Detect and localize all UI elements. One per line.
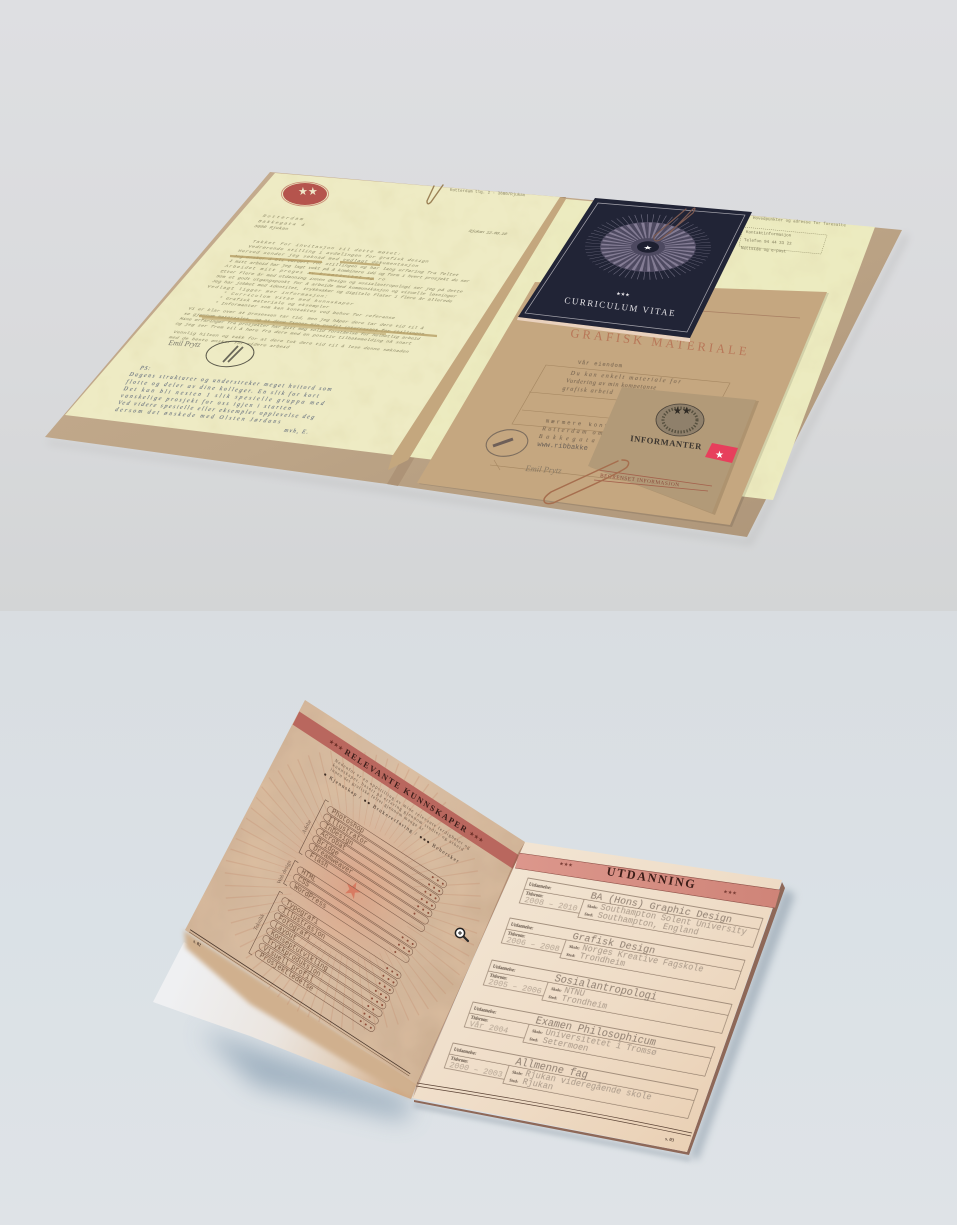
form text: Nærmere kontakt (545, 417, 625, 431)
header band: ★★★ (468, 830, 485, 845)
small typed header: Rotterdam tlg. 2 - 3600/Rjukan (450, 188, 526, 198)
education: Allmenne fag: 2000 – 2003 (448, 1061, 504, 1080)
education: Allmenne fag (443, 1043, 698, 1119)
education: Allmenne fag: Rjukan (521, 1077, 554, 1092)
typed letter: med de beste ønsker for videre arbeid (167, 335, 291, 350)
handwritten note: flotte og deler av dine kolleger. En slik for kort (125, 378, 320, 399)
seal: ★★ (673, 406, 691, 417)
typed letter: Vedrørende stilling i avdelingen for grafisk design (246, 244, 430, 264)
education: BA Graphic Design: BA (Hons) Graphic Design (589, 890, 734, 926)
right page (412, 842, 782, 1152)
cover title: CURRICULUM VITAE (564, 295, 675, 318)
form text: Du kan enkelt materiale for (569, 370, 682, 385)
booklet shadow (200, 1030, 412, 1120)
card: informanter (588, 387, 759, 515)
education: Allmenne fag: Rjukan videregående skole (524, 1069, 653, 1103)
header band: RELEVANTE KUNNSKAPER (343, 746, 469, 835)
photo background: folder (0, 0, 957, 611)
seal: red logo (282, 182, 328, 206)
cover (518, 198, 752, 338)
form text: Bakkegata (538, 434, 595, 445)
red flag with star: ★ (715, 450, 724, 461)
typed letter: Arbeidet mitt preges av kreativitet og ro (223, 264, 387, 282)
rays backdrop: ★ (339, 874, 366, 906)
typed letter: I mitt arbeid har jeg lagt vekt på å kombinere idé og form i hvert prosjekt du ser (227, 258, 472, 284)
handwritten note: PS: (138, 366, 151, 372)
education: Grafisk Design: Sted: (566, 952, 577, 958)
typed letter: Herved sender jeg søknad med vedlagt dokumentasjon (236, 249, 420, 269)
typed letter: Mine erfaringer fra prosjekter har gitt meg solid forståelse for helhetlig arbeid (178, 316, 422, 341)
marker highlights (199, 256, 437, 336)
education: BA Graphic Design: 2008 – 2010 (523, 896, 579, 914)
education: BA Graphic Design: Southampton, England (596, 911, 700, 938)
typed letter: og jeg ser frem til å høre fra dere med en positiv tilbakemelding nå snart (173, 321, 414, 346)
skill names: Visuell profil (262, 945, 314, 984)
education: Grafisk Design: Grafisk Design (571, 931, 657, 957)
folder spine crease (387, 197, 566, 486)
typed letter: Vedlagt ligger mer informasjon: (206, 284, 329, 299)
education: Examen Philosophicum: Utdannelse: (473, 1006, 498, 1015)
group labels: Web design (276, 859, 293, 885)
education: Sosialantropologi: Tidsrom: (489, 973, 509, 981)
education: Sosialantropologi: Sosialantropologi (553, 973, 658, 1004)
skill names: Illustrator (326, 816, 368, 848)
skill names: WordPress (292, 883, 328, 911)
seal (656, 404, 704, 436)
education: Grafisk Design: Norges Kreative Fagskole (581, 943, 705, 975)
typed letter: Jeg har jobbet med identitet, trykksaker og digitale flater i flere år allerede (210, 278, 454, 304)
form text: Rotterdam om (541, 426, 603, 437)
education: Sosialantropologi: 2005 – 2006 (487, 978, 543, 996)
skill names: Prosjektledelse (258, 952, 314, 994)
group labels (253, 818, 313, 932)
education: BA Graphic Design (518, 878, 763, 947)
page stack edge (414, 882, 785, 1155)
education: Sosialantropologi: Skole: (550, 986, 563, 993)
education: Allmenne fag: Allmenne fag (514, 1057, 589, 1082)
page sheet (412, 842, 782, 1152)
skill names: Acrobat (319, 830, 347, 854)
booklet bottom-edge shadow (414, 1102, 690, 1162)
right paper (410, 199, 875, 500)
three stars: ★★★ (616, 291, 630, 299)
clip: cv booklet (654, 208, 695, 241)
footer rules (416, 1083, 692, 1136)
skill names: CSS (296, 876, 310, 890)
education: Examen Philosophicum: Skole: (531, 1028, 544, 1035)
tan fold strip (184, 930, 417, 1098)
typed notes on right paper: Hovedpunkter og adresse for foresatte (753, 216, 846, 228)
education: Grafisk Design: Trondheim (578, 951, 627, 969)
skill names: Fotografi (277, 915, 312, 942)
icon: magnifier cursor (455, 928, 468, 941)
education: BA Graphic Design: Southampton Solent University (599, 903, 748, 937)
skill names: Typografi (284, 900, 319, 927)
education: Grafisk Design: Tidsrom: (507, 931, 527, 939)
typed letter: Vennlig hilsen og takk for at dere tok dere tid til å lese denne søknaden (172, 329, 411, 354)
folder shadow (45, 232, 908, 545)
paperclips (427, 185, 695, 504)
education: Allmenne fag: Skole: (511, 1069, 524, 1076)
typed letter: 3600 Rjukan (252, 224, 290, 231)
typed letter (157, 212, 514, 360)
education: BA Graphic Design: Skole: (586, 903, 599, 910)
education: Examen Philosophicum: Sted: (529, 1036, 540, 1043)
typed letter: Rotterdam (261, 214, 305, 222)
education: Allmenne fag: Sted: (509, 1077, 520, 1084)
folder board (45, 172, 902, 537)
page stack edge (388, 197, 570, 470)
skill names: Konseptutvikling (269, 930, 329, 974)
header band (291, 710, 523, 871)
education: Sosialantropologi (482, 960, 732, 1033)
footer rules and page number (189, 929, 410, 1076)
form lines (490, 365, 730, 482)
letter paper (65, 173, 560, 455)
form text: Vår eiendom (577, 359, 623, 369)
spine shade (413, 842, 525, 1098)
skill names: Photoshop (330, 808, 365, 836)
seal: red logo: ★★ (298, 186, 318, 198)
education: Allmenne fag: Tidsrom: (450, 1056, 470, 1064)
open folder (45, 172, 902, 537)
education: Sosialantropologi: Sted: (548, 994, 559, 1001)
typed letter: Jeg ønsker å bli vurdert for stillingen og har lang erfaring fra feltet (232, 253, 461, 278)
red flag with star (705, 443, 738, 463)
form text: grafisk arbeid (562, 385, 614, 396)
signature and stamp: Emil Prytz (166, 338, 202, 349)
education: Examen Philosophicum: Universitetet i Tromsø (544, 1028, 658, 1058)
clip: letter (427, 185, 443, 204)
rays backdrop (225, 747, 481, 1033)
typed letter: Som et godt utgangspunkt for å arbeide med kommunikasjon og visuelle løsninger (214, 273, 459, 299)
card title: INFORMANTER (630, 433, 703, 452)
clip: envelope (544, 460, 629, 504)
page number: s. 03 (665, 1137, 675, 1144)
left page (153, 700, 525, 1099)
education: Sosialantropologi: Trondheim (560, 994, 609, 1012)
envelope: grafisk materiale (417, 282, 829, 527)
footer rules and page number: s. 02 (192, 938, 203, 948)
intro text: kunnskaper, basert på erfaring gjennom studier og arbeid (331, 762, 465, 853)
top rule (700, 311, 800, 318)
signature: Emil Prytz (524, 463, 563, 476)
skill names: Dreamweaver (311, 845, 354, 877)
envelope body (417, 282, 827, 525)
skill names: InDesign (322, 823, 354, 849)
handwritten note (110, 365, 335, 436)
envelope title: GRAFISK MATERIALE (570, 326, 748, 358)
website line: www.ribbakke (536, 441, 588, 453)
open booklet (153, 700, 785, 1155)
typed letter: se gjennom materialet, og at dere finner min profil interessant for stillingen (182, 312, 426, 336)
education: Examen Philosophicum: Vår 2004 (468, 1019, 510, 1036)
header band: ★★★ (328, 738, 344, 753)
intro text: Nedenfor er en oppstilling av mine relevante ferdigheter og (334, 758, 471, 851)
handwritten note: Dagens strukturer og understreker meget hvitord som (127, 372, 332, 393)
education: BA Graphic Design: Sted: (584, 911, 594, 918)
handwritten note: dersom det ønskede med Olsten Jørdans (114, 407, 282, 425)
form text (538, 357, 684, 450)
education: Sosialantropologi: NTNU (563, 986, 586, 999)
education: Grafisk Design: 2006 – 2008 (505, 936, 561, 954)
handwritten note: vanskelige prosjekt for oss igjen i starten (120, 392, 292, 412)
education: Examen Philosophicum: Examen Philosophicum (534, 1015, 657, 1049)
education: Grafisk Design: Skole: (568, 944, 581, 951)
typed notes on right paper: Nettside og e-post (741, 246, 787, 255)
typed letter: Rjukan 12.08.10 (467, 229, 509, 237)
education: Examen Philosophicum: Setermoen (541, 1036, 590, 1054)
skill names: Bridge (315, 838, 340, 859)
skill names: Trykkproduksjon (265, 937, 322, 979)
typed notes on right paper (739, 216, 846, 255)
skill names: Flash (308, 852, 329, 871)
skill names: Illustrasjon (280, 907, 326, 942)
inner border (525, 203, 745, 332)
skill names (260, 808, 368, 991)
typed letter: Vi er klar over at prosessen tar tid, men jeg håper dere tar dere tid til å (186, 306, 426, 331)
page content (179, 707, 524, 1086)
typed letter: * Grafisk materiale og eksempler (217, 296, 331, 310)
red ribbon text: BEGRENSET INFORMASJON (600, 473, 680, 489)
header band: UTDANNING (605, 864, 697, 891)
intro text: innen det grafiske feltet gjennom mange år (330, 767, 425, 832)
education: Grafisk Design (500, 918, 745, 989)
skill legend: ● Kjennskap / ●● Brukererfaring / ●●● Behersker (322, 771, 460, 865)
skill rows (254, 805, 448, 1033)
skill rating dots (361, 877, 443, 1028)
handwritten note: Det kan bli nesten 1 slik spesielle gruppa med (121, 386, 325, 407)
booklet: curriculum vitae (517, 198, 752, 342)
education: BA Graphic Design: Tidsrom: (525, 891, 545, 899)
starburst emblem (597, 220, 699, 274)
education: Grafisk Design: Utdannelse: (510, 922, 535, 931)
education: BA Graphic Design: Utdannelse: (528, 882, 553, 890)
education: Sosialantropologi: Utdannelse: (492, 964, 517, 973)
typed letter: * Informanter som kan kontaktes ved behov for referanse (213, 301, 396, 321)
handwritten note: mvh, E. (283, 428, 309, 436)
group labels: Adobe (301, 818, 313, 835)
typed letter: Takket for invitasjon til dette møtet: (251, 239, 402, 256)
typed letter: Bakkegata 4 (256, 219, 306, 227)
handwritten note: Ved videre spesielle eller eksempler opplevelse deg (117, 400, 315, 421)
header band: ★★★ (559, 861, 574, 869)
skill names: Layout (273, 922, 298, 943)
stamp (484, 427, 530, 459)
signature and stamp (166, 338, 255, 369)
starburst emblem: ★ (643, 244, 653, 251)
skill names: HTML (300, 869, 317, 885)
booklet right-edge shadow (690, 888, 795, 1160)
typed notes on right paper: Kontaktinformasjon (746, 230, 792, 239)
education: Examen Philosophicum: Tidsrom: (470, 1015, 490, 1023)
education: Examen Philosophicum (463, 1002, 715, 1076)
header band (515, 853, 780, 908)
group labels: Teknikk (253, 913, 266, 932)
red ribbon text (594, 470, 712, 491)
curled lower page (153, 942, 417, 1099)
left letter page (65, 173, 570, 470)
page sheet (185, 700, 525, 1085)
form text: Vurdering av min kompetanse (565, 378, 657, 392)
header band: ★★★ (723, 889, 738, 897)
education: Allmenne fag: Utdannelse: (453, 1047, 478, 1056)
typed letter: Etter flere år med utdanning innen design og sosialantropologi ser jeg på dette (219, 268, 465, 294)
group brackets (249, 800, 329, 955)
photo background: booklet (0, 611, 957, 1225)
typed letter: * Curriculum Vitae med kunnskaper (221, 291, 355, 306)
typed notes on right paper: Telefon 94 44 33 22 (744, 238, 792, 247)
